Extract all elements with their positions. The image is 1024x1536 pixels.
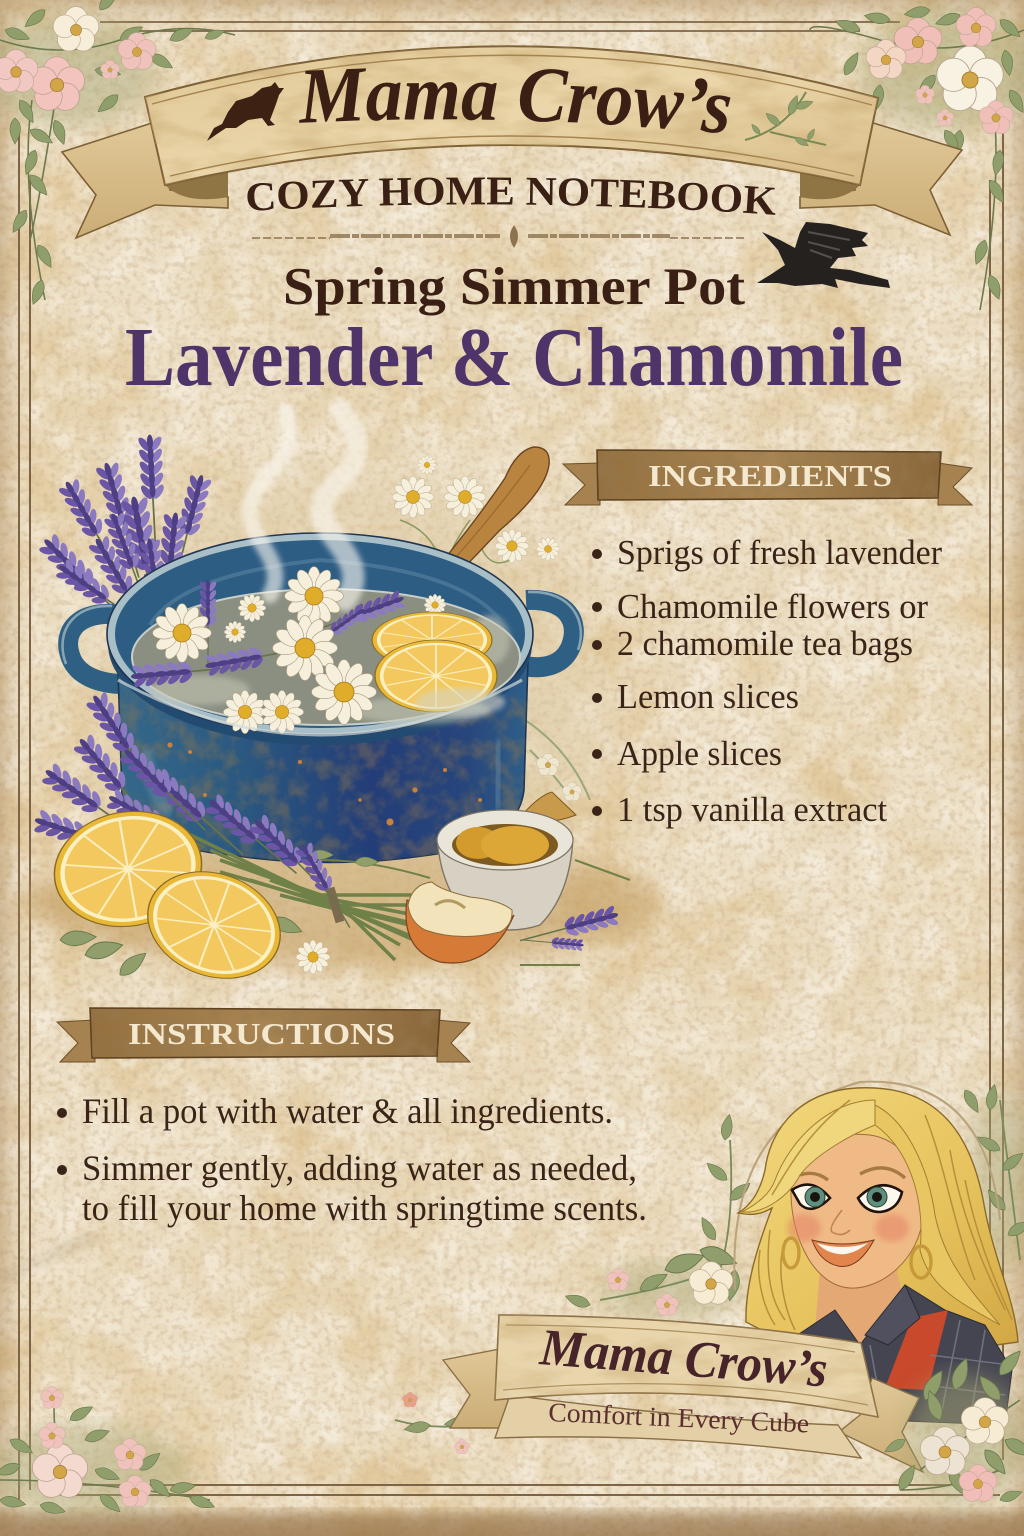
bowl of honey [437, 810, 573, 930]
lavender bunch lower left [31, 688, 359, 933]
bangs [742, 1100, 875, 1212]
ground shading [20, 843, 660, 967]
ingredients label: INGREDIENTS [648, 458, 892, 493]
hair back [738, 1088, 1018, 1350]
icon: black crow flying [757, 222, 890, 288]
ingredients list: 2 chamomile tea bags [617, 624, 913, 663]
steam [250, 410, 358, 600]
top banner ribbon [62, 40, 962, 238]
lavender bunch upper left [35, 434, 214, 647]
footer brand name: Mama Crow’s [537, 1319, 830, 1399]
chamomile behind pot [392, 456, 560, 565]
floral corner bottom right [882, 1347, 1024, 1505]
background herbs halo [80, 470, 600, 930]
shirt [790, 1285, 1012, 1425]
eyes [792, 1168, 905, 1212]
floating lavender [130, 580, 407, 689]
ingredients list: Sprigs of fresh lavender [617, 533, 942, 572]
instructions list: Fill a pot with water & all ingredients. [82, 1091, 613, 1131]
title: Mama Crow's: Mama Crow’s [299, 68, 730, 133]
pot body [118, 660, 528, 862]
smile [812, 1240, 874, 1266]
floating lemon slices [372, 612, 505, 716]
neck [815, 1260, 905, 1350]
face [791, 1134, 923, 1288]
portrait: Mama Crow [734, 1082, 1018, 1425]
lower rim highlight [118, 680, 522, 735]
instructions list: Simmer gently, adding water as needed, [82, 1148, 637, 1188]
lemon halves [45, 800, 295, 996]
ingredients list: 1 tsp vanilla extract [617, 790, 887, 829]
icon: brown crow on banner [207, 82, 284, 141]
pot rim and water [107, 533, 533, 745]
ingredients list: Lemon slices [617, 677, 799, 716]
floral spray by portrait [395, 1083, 1024, 1454]
apple slice [406, 882, 514, 963]
amber curl [522, 792, 576, 821]
ingredients list: Chamomile flowers or [617, 587, 928, 626]
floral corner top right [810, 5, 1024, 310]
ingredients list: Apple slices [617, 734, 782, 773]
floral corner top left [0, 0, 235, 306]
instructions list: to fill your home with springtime scents. [82, 1188, 647, 1228]
instructions list [57, 1091, 647, 1228]
small daisy [296, 940, 330, 974]
lavender sprig right [517, 860, 630, 965]
nose [831, 1210, 850, 1235]
pot highlights and speckles [118, 675, 526, 862]
blush [787, 1214, 821, 1242]
herb bundle [59, 830, 445, 980]
ingredients list [592, 533, 942, 829]
ornamental divider [252, 226, 745, 247]
footer ribbon [443, 1312, 923, 1472]
icon: green sprig on banner [745, 92, 826, 148]
footer tagline: Comfort in Every Cube [548, 1397, 810, 1438]
heading: Spring Simmer Pot: Spring Simmer Pot [283, 258, 745, 316]
pot handles [63, 592, 581, 684]
vine behind pot right [525, 720, 590, 801]
floating chamomile [153, 567, 446, 734]
ingredients banner [563, 450, 972, 505]
heading: Lavender & Chamomile: Lavender & Chamomile [125, 311, 903, 404]
subtitle: Cozy Home Notebook: COZY HOME NOTEBOOK [247, 178, 776, 215]
hoop earrings [783, 1238, 931, 1278]
floral corner bottom left [0, 1386, 216, 1517]
illustration: simmer pot with herbs and fruit [20, 410, 660, 996]
wooden spoon [408, 447, 549, 612]
instructions label: INSTRUCTIONS [128, 1016, 395, 1051]
instructions banner [57, 1008, 470, 1062]
